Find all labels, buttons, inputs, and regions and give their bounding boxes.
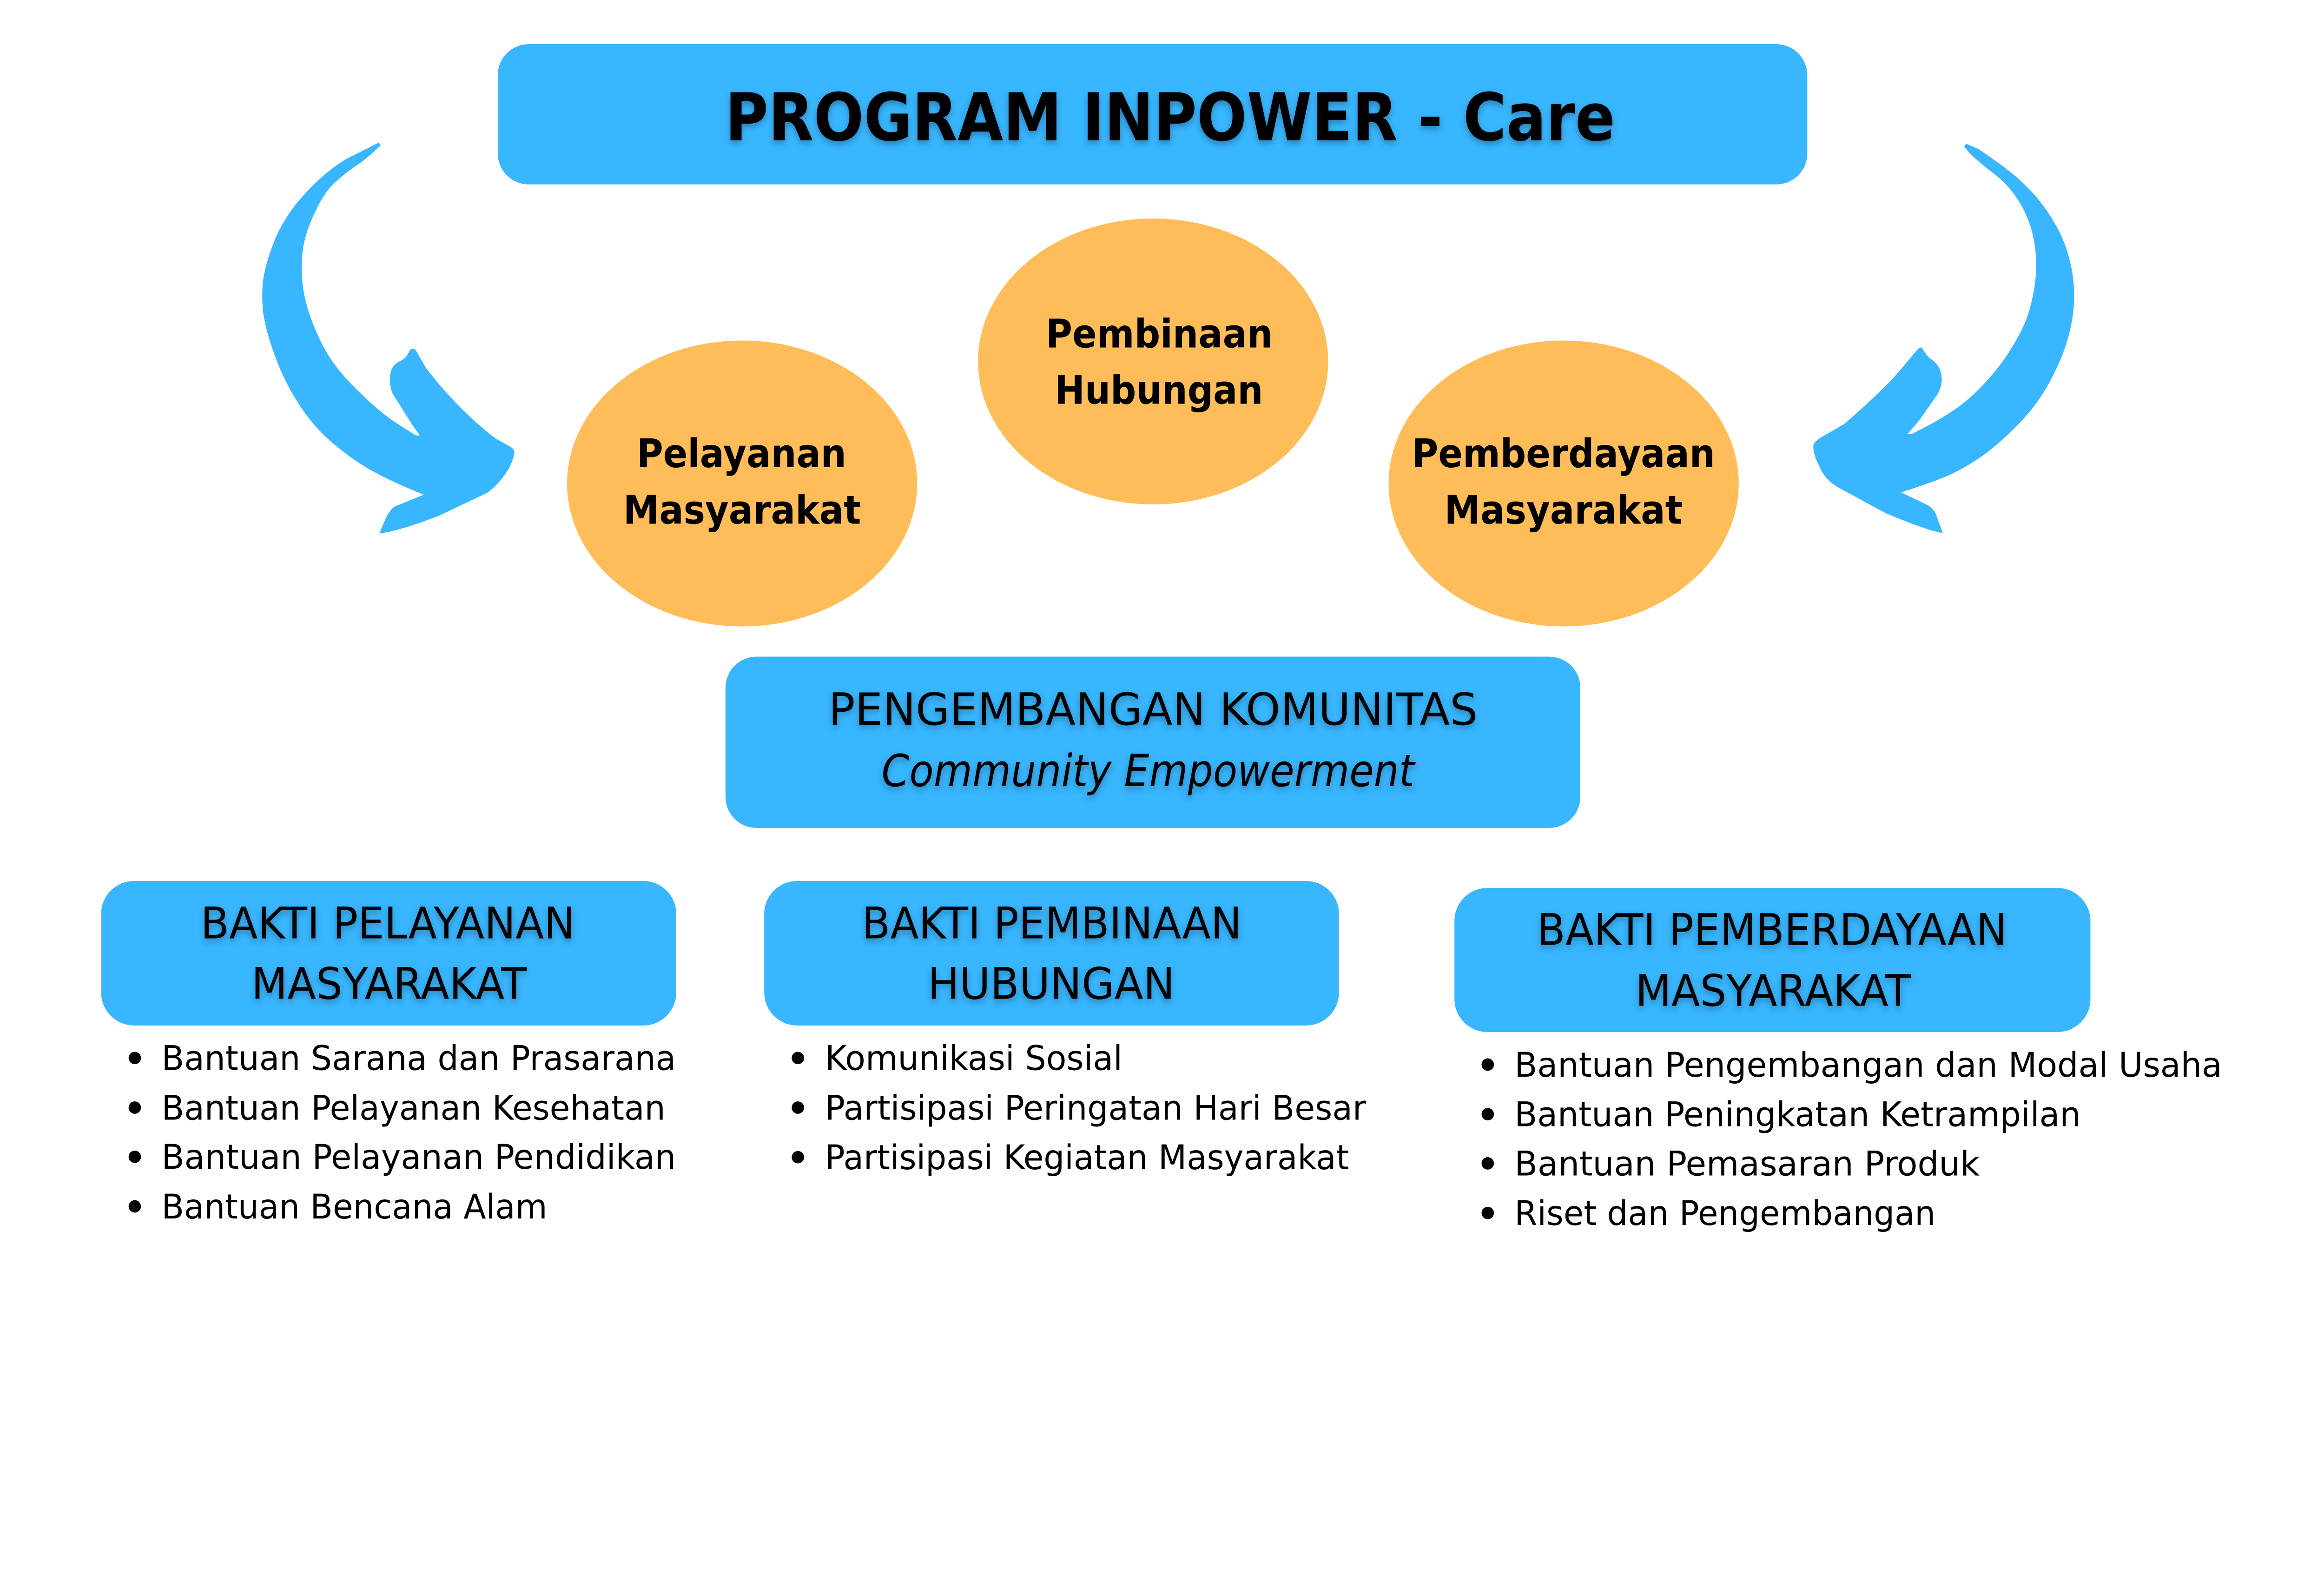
title banner [498,44,1807,185]
list: Bakti Pelayanan items: Bantuan Sarana dan Prasarana [162,1039,676,1079]
panel: Bakti Pemberdayaan Masyarakat [1454,888,2091,1032]
panel: Bakti Pembinaan Hubungan [764,881,1339,1026]
list: Bakti Pembinaan items: Partisipasi Kegiatan Masyarakat [825,1138,1349,1178]
title banner: PROGRAM INPOWER - Care [725,80,1615,156]
list: Bakti Pelayanan items [129,1039,676,1227]
panel: Pengembangan Komunitas: PENGEMBANGAN KOMUNITAS [828,684,1478,735]
circle: Pelayanan Masyarakat: Pelayanan [637,431,846,477]
circle: Pelayanan Masyarakat: Masyarakat [623,488,861,534]
panel: Pengembangan Komunitas [726,656,1580,828]
panel: Bakti Pemberdayaan Masyarakat: BAKTI PEMBERDAYAAN [1537,905,2007,956]
panel: Bakti Pelayanan Masyarakat: MASYARAKAT [251,959,527,1009]
list: Bakti Pemberdayaan items: Bantuan Peningkatan Ketrampilan [1514,1095,2081,1135]
list: Bakti Pembinaan items: Partisipasi Peringatan Hari Besar [825,1088,1367,1128]
arrow: left curved arrow [262,143,515,534]
panel: Bakti Pelayanan Masyarakat: BAKTI PELAYANAN [201,898,575,949]
panel: Bakti Pelayanan Masyarakat [101,881,676,1026]
list: Bakti Pelayanan items: Bantuan Pelayanan Kesehatan [162,1088,666,1128]
list: Bakti Pemberdayaan items: Riset dan Pengembangan [1514,1194,1935,1233]
panel: Bakti Pemberdayaan Masyarakat: MASYARAKAT [1635,966,1911,1016]
circle: Pembinaan Hubungan: Hubungan [1055,367,1263,413]
list: Bakti Pelayanan items: Bantuan Bencana Alam [162,1187,548,1227]
circle: Pembinaan Hubungan: Pembinaan [1046,311,1273,357]
list: Bakti Pembinaan items [792,1039,1367,1178]
list: Bakti Pembinaan items: Komunikasi Sosial [825,1039,1122,1079]
list: Bakti Pemberdayaan items: Bantuan Pengembangan dan Modal Usaha [1514,1046,2222,1085]
panel: Bakti Pembinaan Hubungan: BAKTI PEMBINAAN [862,898,1242,949]
circle: Pemberdayaan Masyarakat: Pemberdayaan [1412,431,1715,477]
panel: Bakti Pembinaan Hubungan: HUBUNGAN [928,959,1175,1009]
panel: Pengembangan Komunitas: Community Empowerment [882,746,1416,797]
arrow: right curved arrow [1813,144,2074,533]
circle: Pemberdayaan Masyarakat: Masyarakat [1445,488,1683,534]
circle: Pembinaan Hubungan [978,218,1328,504]
list: Bakti Pemberdayaan items [1482,1046,2222,1233]
circle: Pemberdayaan Masyarakat [1389,340,1739,627]
list: Bakti Pemberdayaan items: Bantuan Pemasaran Produk [1514,1144,1980,1184]
list: Bakti Pelayanan items: Bantuan Pelayanan Pendidikan [162,1138,676,1177]
circle: Pelayanan Masyarakat [567,340,917,627]
